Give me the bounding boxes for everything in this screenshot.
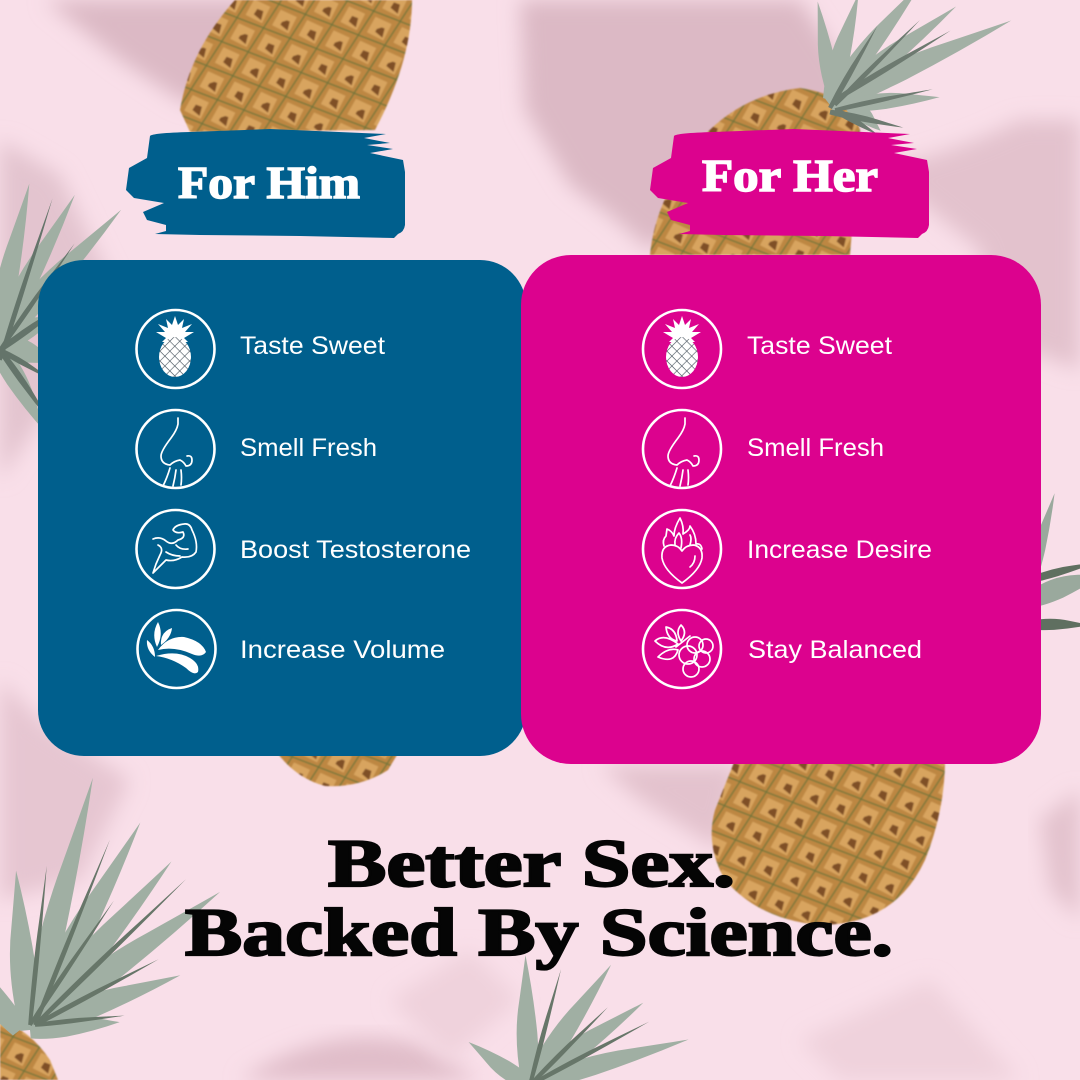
benefit: smell fresh xyxy=(643,410,884,488)
headline: Better Sex. xyxy=(328,825,735,901)
panel: for her xyxy=(521,255,1041,764)
benefit: smell fresh: Smell Fresh xyxy=(747,434,884,462)
benefit: taste sweet xyxy=(643,310,892,388)
pineapple: bottom left leaves and fruit xyxy=(0,774,227,1080)
benefit: taste sweet: Taste Sweet xyxy=(240,332,385,360)
panel: for him xyxy=(38,260,526,756)
benefit: increase desire xyxy=(643,510,932,588)
benefit: stay balanced xyxy=(643,610,922,688)
pineapple: bottom of centre fruit xyxy=(275,750,400,786)
pineapple: bottom centre leaves xyxy=(463,955,691,1080)
benefit: boost testosterone: Boost Testosterone xyxy=(240,536,471,564)
brush label: For Her: For Her xyxy=(702,150,878,201)
benefit: smell fresh xyxy=(136,410,377,488)
benefit: increase volume: Increase Volume xyxy=(240,636,445,664)
pineapple: top centre xyxy=(180,0,412,132)
benefit: increase desire: Increase Desire xyxy=(747,536,932,564)
benefit: taste sweet xyxy=(136,310,385,388)
pineapple: top right with leaves xyxy=(650,0,1015,255)
benefit: stay balanced: Stay Balanced xyxy=(748,636,922,664)
pineapple: lower right fruit xyxy=(712,760,945,925)
pineapple: right edge leaves xyxy=(1023,491,1080,630)
pineapple: left leaves xyxy=(0,181,129,436)
benefit: smell fresh: Smell Fresh xyxy=(240,434,377,462)
benefit: boost testosterone xyxy=(136,510,471,588)
brush label: For Her xyxy=(650,129,929,238)
brush label: For Him: For Him xyxy=(178,157,360,208)
headline xyxy=(185,825,893,970)
brush label: For Him xyxy=(126,129,405,238)
benefit: taste sweet: Taste Sweet xyxy=(747,332,892,360)
benefit: increase volume xyxy=(138,610,445,688)
headline: Backed By Science. xyxy=(185,894,893,970)
